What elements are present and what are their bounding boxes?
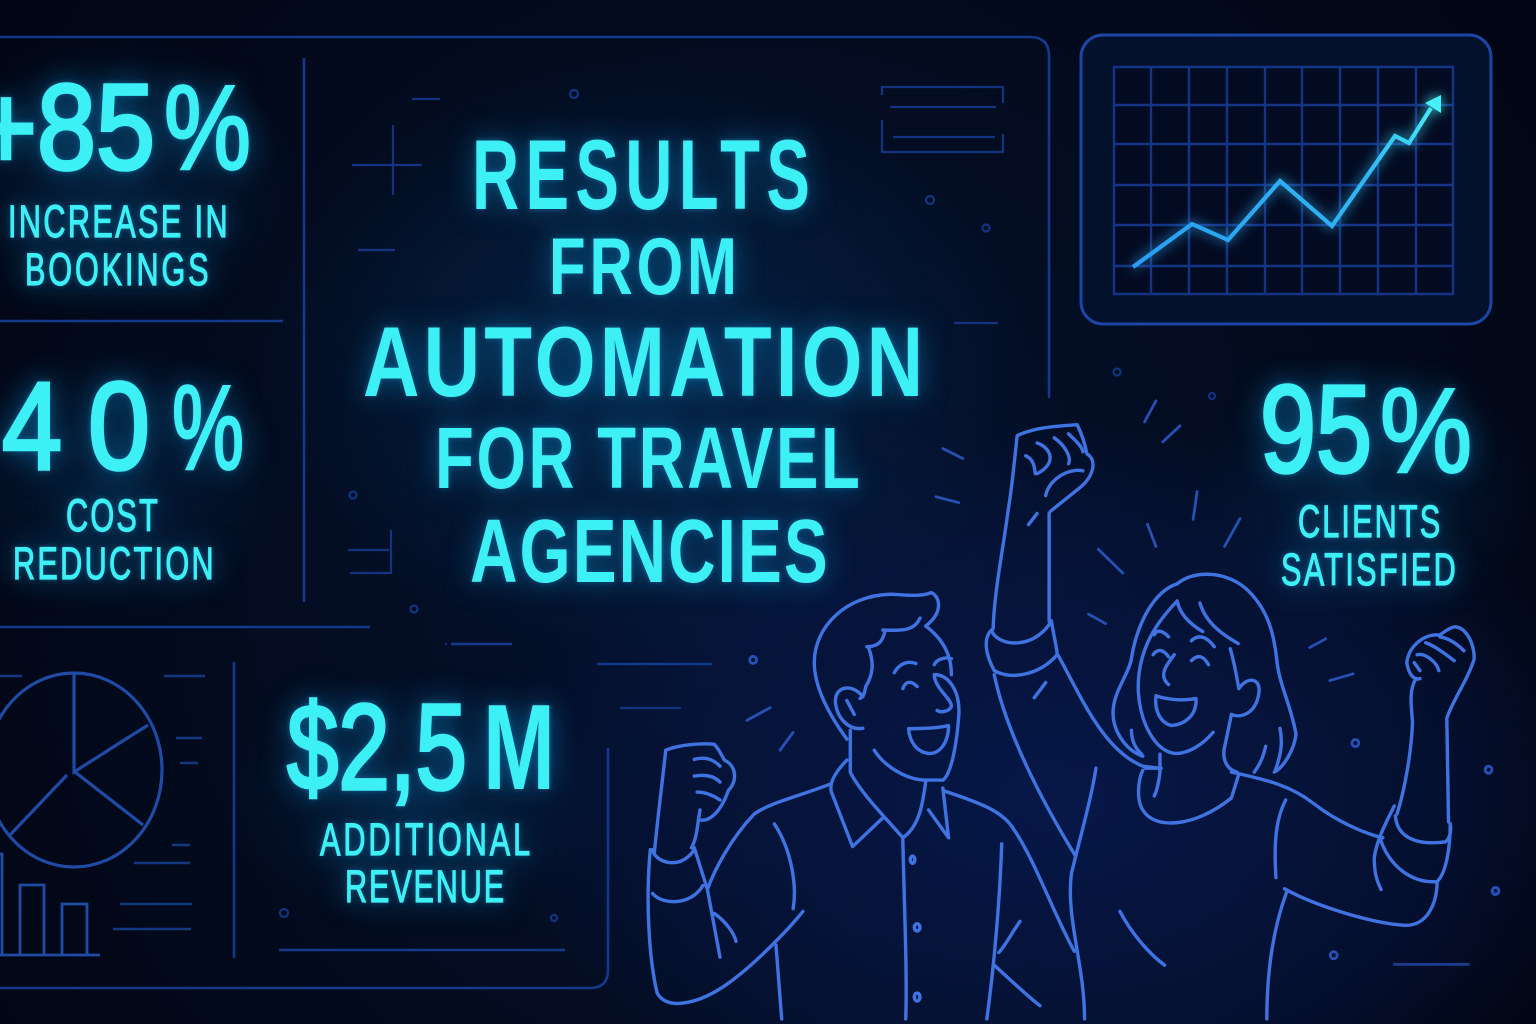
stat: 95% clients satisfied: 95: [1260, 361, 1372, 499]
stat: $2,5M additional revenue: $2,5: [287, 679, 467, 815]
title: AGENCIES: [470, 501, 828, 601]
stat: +85% increase in bookings: %: [164, 61, 251, 195]
pie chart: [0, 672, 162, 867]
stat: 95% clients satisfied: %: [1380, 364, 1472, 498]
raised arm and fist: [993, 425, 1093, 629]
stat: $2,5M additional revenue: ADDITIONAL: [320, 815, 530, 866]
stat: 95% clients satisfied: [1260, 361, 1472, 596]
stat: +85% increase in bookings: INCREASE IN: [8, 197, 228, 248]
chart: pie and bars: [0, 672, 205, 955]
stat: 40% cost reduction: [2, 358, 244, 590]
sleeve and arm: [648, 848, 803, 1003]
illustration: celebrating woman: [986, 425, 1474, 1019]
title: AUTOMATION: [363, 306, 923, 417]
stat: 95% clients satisfied: SATISFIED: [1281, 545, 1456, 596]
title: FOR TRAVEL: [435, 410, 860, 507]
stat: 40% cost reduction: COST: [66, 491, 158, 542]
collar and shirt: [831, 730, 949, 847]
title: RESULTS: [472, 119, 810, 230]
chart grid: [1114, 67, 1453, 294]
stat: 40% cost reduction: 0: [88, 358, 150, 496]
stat: $2,5M additional revenue: M: [483, 679, 555, 815]
illustration: celebrating man: [648, 593, 1074, 1019]
decoration: small details: [280, 87, 1499, 921]
stat: 40% cost reduction: REDUCTION: [13, 539, 214, 590]
head and hair: [814, 593, 951, 739]
tablet frame: [1081, 35, 1491, 324]
decoration: celebration rays and dots: [747, 401, 1499, 964]
lowered arm and fist: [1285, 806, 1451, 925]
title: FROM: [549, 221, 737, 312]
legend lines: [0, 676, 205, 929]
stat: +85% increase in bookings: [0, 59, 251, 296]
stat: 95% clients satisfied: CLIENTS: [1298, 497, 1440, 548]
bar chart: [0, 854, 100, 955]
stat: 40% cost reduction: %: [172, 361, 244, 495]
raised fist: [654, 744, 735, 854]
trend line with arrow: [1133, 95, 1441, 267]
stat: $2,5M additional revenue: REVENUE: [345, 862, 504, 913]
stat: 40% cost reduction: 4: [2, 358, 62, 496]
title: [363, 119, 923, 601]
chart: growth line in tablet frame: [1081, 35, 1491, 324]
hair and face: [1113, 574, 1296, 772]
stat: $2,5M additional revenue: [287, 679, 555, 913]
stat: +85% increase in bookings: BOOKINGS: [25, 245, 209, 296]
neck and top: [1139, 754, 1239, 823]
